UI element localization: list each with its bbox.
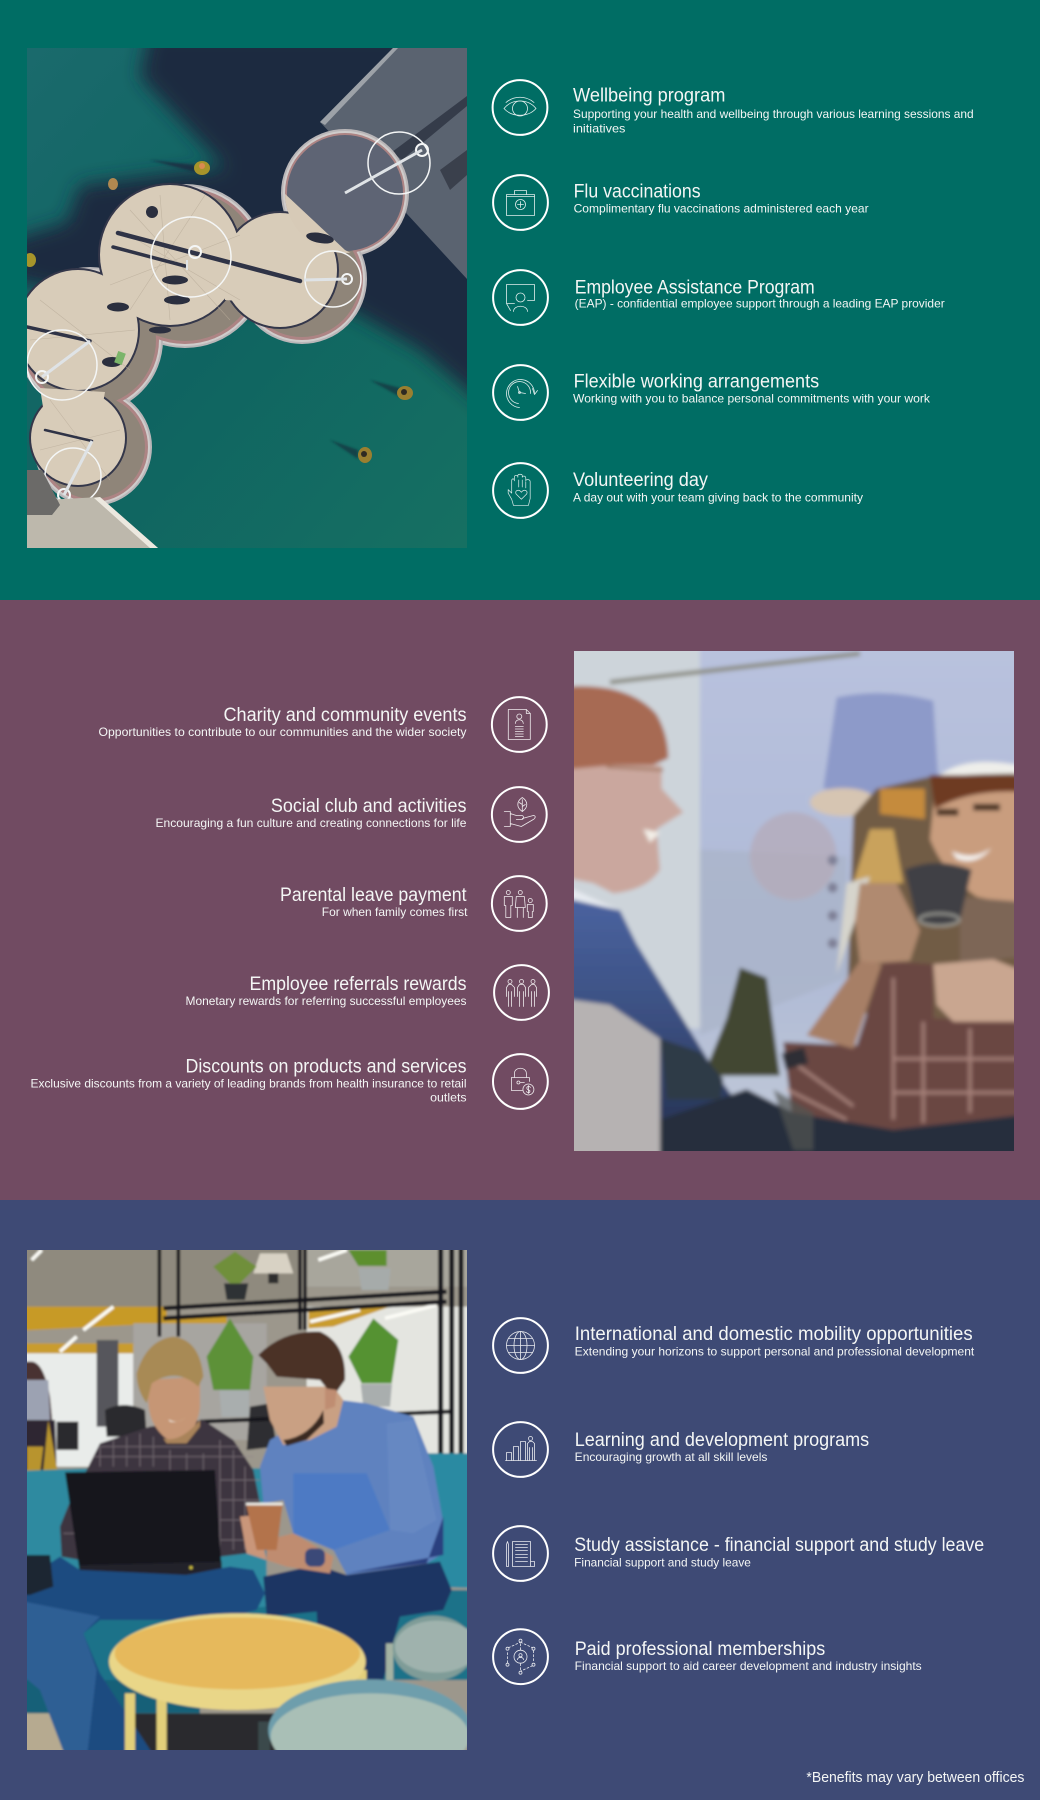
description: [573, 108, 974, 136]
icon: family figures: [492, 876, 547, 931]
cup: [905, 863, 972, 925]
heading: International and domestic mobility opportunities: [575, 1324, 973, 1345]
left woman jumper: [574, 898, 733, 1122]
icon: document with person: [492, 697, 547, 752]
icon: hand holding leaf: [492, 787, 547, 842]
heading: Study assistance - financial support and study leave: [574, 1535, 984, 1556]
heading: Social club and activities: [271, 796, 466, 817]
buoys: [24, 160, 413, 463]
benefit: learning and development programs: [493, 1422, 869, 1477]
panel: wellbeing benefits section: [27, 48, 973, 548]
woman in background: [27, 1360, 54, 1422]
benefit: discounts on products and services: [30, 1054, 548, 1109]
section background teal: [0, 0, 1040, 600]
car reflection: [574, 996, 664, 1151]
description: Monetary rewards for referring successful employees: [186, 995, 467, 1008]
benefit: employee referrals rewards: [186, 965, 549, 1020]
icon: bar chart with person: [493, 1422, 548, 1477]
heading: Charity and community events: [224, 705, 466, 726]
description: [30, 1078, 467, 1105]
icon: clock with arrow: [493, 365, 548, 420]
heading: Learning and development programs: [575, 1430, 869, 1451]
heading: Employee Assistance Program: [575, 277, 815, 298]
land at bottom-left: [27, 497, 158, 548]
description: Extending your horizons to support personal and professional development: [575, 1346, 975, 1359]
heading: Discounts on products and services: [186, 1057, 466, 1078]
photo: two colleagues with laptop on sofa: [27, 1250, 467, 1750]
description: initiatives: [573, 122, 626, 136]
icon: three people: [494, 965, 549, 1020]
right woman face: [927, 788, 1014, 904]
benefit: volunteering day: [493, 463, 863, 518]
right man pants: [263, 1562, 452, 1680]
grey table right: [386, 1643, 393, 1680]
plants and pots: [224, 1283, 248, 1300]
description: Financial support to aid career development and industry insights: [575, 1660, 922, 1673]
wall light: [253, 1253, 293, 1273]
icon: hand with heart: [493, 463, 548, 518]
yellow table: [125, 1670, 367, 1760]
benefit: international and domestic mobility: [493, 1318, 975, 1373]
benefit: wellbeing program: [493, 80, 974, 136]
heading: Employee referrals rewards: [250, 974, 466, 995]
benefit: flexible working arrangements: [493, 365, 930, 420]
panel: career development benefits section: [0, 1200, 1040, 1800]
description: Encouraging a fun culture and creating connections for life: [156, 817, 466, 830]
laptop: [65, 1470, 222, 1573]
sofa seat: [27, 1588, 467, 1682]
description: A day out with your team giving back to the community: [573, 492, 863, 505]
photo: two women laughing behind window: [574, 651, 1014, 1151]
icon: globe: [493, 1318, 548, 1373]
left man jeans: [27, 1556, 266, 1750]
dark foreground: [660, 1087, 1014, 1151]
description: Working with you to balance personal commitments with your work: [573, 393, 930, 406]
sofa back: [27, 1467, 268, 1609]
plaid shirt: [783, 961, 1040, 1133]
icon: eye: [493, 80, 547, 135]
description: Opportunities to contribute to our communities and the wider society: [98, 726, 467, 739]
icon: presenter at screen: [493, 270, 548, 325]
heading: Wellbeing program: [573, 86, 725, 106]
teal table bottom: [258, 1722, 270, 1760]
description: Supporting your health and wellbeing through various learning sessions and: [573, 108, 974, 121]
description: Financial support and study leave: [574, 1557, 751, 1570]
panel: community and family benefits section: [0, 600, 1040, 1200]
shelving frame: [159, 1240, 461, 1453]
icon: medical case: [493, 175, 548, 230]
hands: [855, 883, 920, 964]
shadow lines on deck: [27, 233, 300, 441]
heading: Flexible working arrangements: [574, 371, 819, 392]
neck and chest: [960, 898, 1014, 961]
benefit: charity and community events: [98, 697, 547, 752]
section background navy: [0, 1200, 1040, 1800]
left woman face: [560, 765, 683, 893]
benefit: flu vaccinations: [493, 175, 869, 230]
benefit: employee assistance program: [493, 270, 945, 325]
icon: lock with dollar coin: [493, 1054, 548, 1109]
inner deck shadow edge: [16, 183, 339, 487]
warm interior behind right woman: [845, 771, 1014, 1023]
bridge rings: [18, 130, 408, 505]
benefit: parental leave payment: [280, 876, 547, 931]
lamp reflection: [823, 693, 938, 795]
right man shirt: [260, 1400, 443, 1575]
deck surface: [18, 185, 337, 485]
heading: Flu vaccinations: [574, 181, 701, 202]
floor: [27, 1712, 64, 1750]
heading: Paid professional memberships: [575, 1639, 825, 1660]
icon: member network: [493, 1629, 548, 1684]
description: Exclusive discounts from a variety of leading brands from health insurance to retail: [30, 1078, 466, 1091]
trees and car reflection: [703, 968, 780, 1076]
left man head: [147, 1377, 200, 1443]
benefit: study assistance: [493, 1526, 984, 1581]
left woman hair: [560, 686, 668, 773]
description: (EAP) - confidential employee support through a leading EAP provider: [575, 298, 945, 311]
benefit: social club and activities: [156, 787, 547, 842]
left man shirt: [60, 1420, 260, 1560]
heading: Volunteering day: [573, 470, 708, 491]
icon: pencil and calculator sheet: [493, 1526, 548, 1581]
description: Complimentary flu vaccinations administered each year: [574, 203, 869, 216]
description: Encouraging growth at all skill levels: [575, 1451, 768, 1464]
description: For when family comes first: [322, 906, 468, 919]
section background plum: [0, 600, 1040, 1200]
footnote: *Benefits may vary between offices: [806, 1770, 1024, 1786]
hands, cup and watch: [240, 1515, 267, 1560]
lights: [32, 1250, 437, 1352]
photo: aerial view of circular bridge: [27, 48, 467, 548]
benefit: paid professional memberships: [493, 1629, 922, 1684]
white wheels: [27, 132, 430, 504]
description: outlets: [430, 1092, 467, 1105]
right man head: [263, 1387, 343, 1445]
heading: Parental leave payment: [280, 885, 467, 906]
chairs: [57, 1405, 147, 1450]
